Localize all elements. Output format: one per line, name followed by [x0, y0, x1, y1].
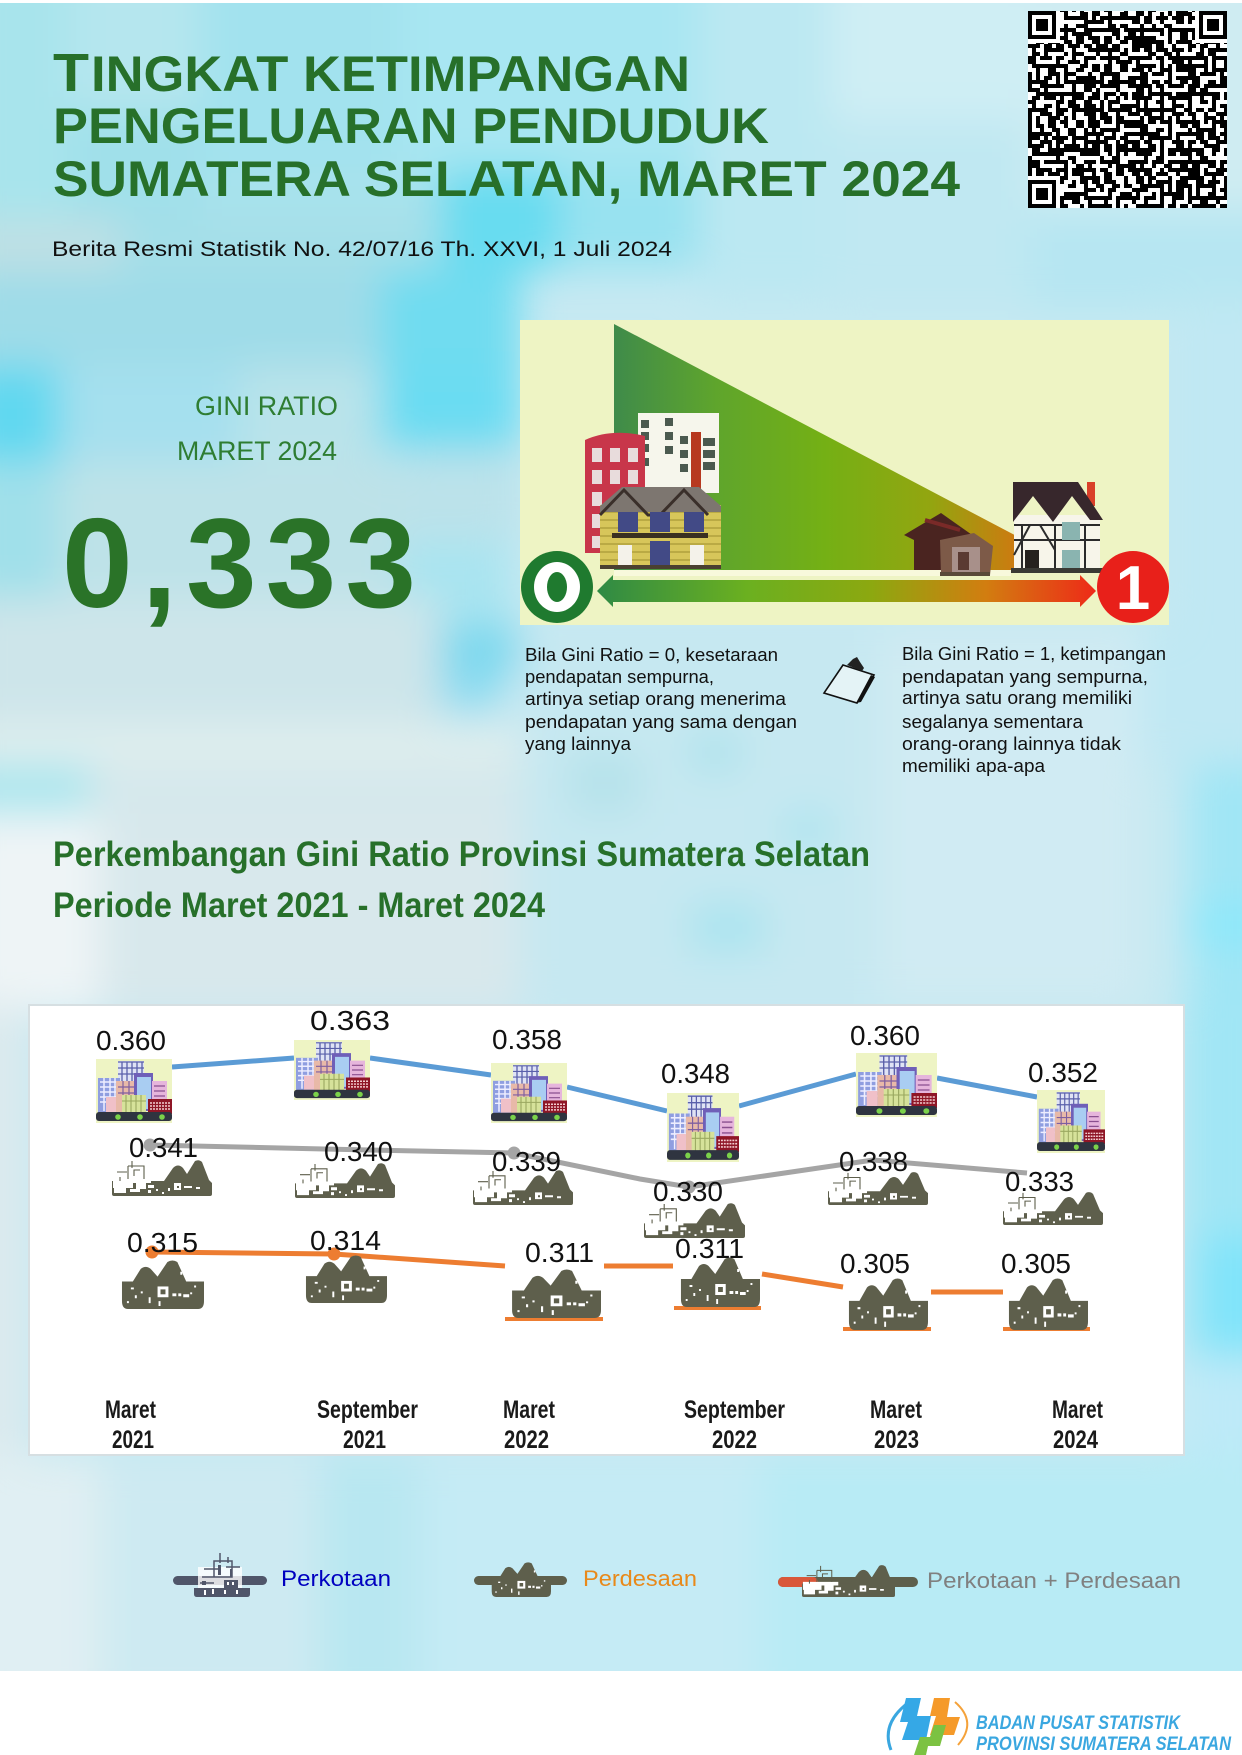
axis labels: 2021: [343, 1426, 386, 1454]
data labels: perdesaan: 0.311: [675, 1233, 744, 1264]
axis labels: September: [317, 1396, 418, 1424]
axis labels: Maret: [105, 1396, 157, 1424]
icon: white timber house: [1011, 482, 1103, 573]
icon: zero badge: [521, 551, 593, 623]
text block: gini ratio zero: pendapatan sempurna,: [525, 666, 714, 687]
gini ratio headline: [62, 391, 416, 634]
text block: gini ratio zero: Bila Gini Ratio = 0, kesetaraan: [525, 644, 778, 665]
text block: gini ratio zero: artinya setiap orang menerima: [525, 688, 787, 709]
data labels: perdesaan: [127, 1225, 1071, 1279]
data labels: gabungan: 0.330: [653, 1176, 723, 1207]
text block: gini ratio zero: yang lainnya: [525, 733, 632, 754]
data labels: gabungan: 0.339: [492, 1146, 561, 1177]
data labels: perkotaan: 0.360: [850, 1020, 920, 1051]
data labels: perdesaan: 0.315: [127, 1227, 198, 1258]
icon: one badge: 1: [1116, 554, 1150, 623]
title: SUMATERA SELATAN, MARET 2024: [53, 151, 960, 207]
data labels: perkotaan: 0.358: [492, 1024, 562, 1055]
data labels: perdesaan: 0.305: [840, 1248, 910, 1279]
data labels: gabungan: [129, 1132, 1074, 1207]
big value: 0,333: [62, 492, 416, 634]
icons: perkotaan markers: [96, 1040, 1105, 1162]
text block: gini ratio one: pendapatan yang sempurna,: [902, 666, 1148, 687]
panel: line chart: [29, 1005, 1184, 1455]
text block: gini ratio one: Bila Gini Ratio = 1, ketimpangan: [902, 643, 1166, 664]
arrow: equality to inequality scale: [597, 575, 1096, 607]
data labels: gabungan: 0.340: [324, 1136, 393, 1167]
legend: [173, 1553, 1181, 1597]
axis labels: 2023: [874, 1426, 919, 1454]
footer white band: [0, 1671, 1242, 1755]
axis labels: 2021: [112, 1426, 154, 1454]
axis labels: Maret: [1052, 1396, 1104, 1424]
data labels: perkotaan: 0.360: [96, 1025, 166, 1056]
legend item: perkotaan + perdesaan: [778, 1565, 1181, 1597]
gradient wedge: [614, 324, 1081, 570]
data labels: perdesaan: 0.305: [1001, 1248, 1071, 1279]
icons: perdesaan markers: [122, 1255, 1088, 1330]
axis labels: September: [684, 1396, 785, 1424]
data labels: gabungan: 0.341: [129, 1132, 198, 1163]
title: INGKAT KETIMPANGAN: [91, 46, 690, 102]
text block: gini ratio one: artinya satu orang memiliki: [902, 687, 1132, 708]
axis labels: Maret: [870, 1396, 923, 1424]
axis labels: 2022: [712, 1426, 757, 1454]
axis labels: 2022: [504, 1426, 549, 1454]
icons: gabungan markers: [112, 1160, 1103, 1238]
logo text: BADAN PUSAT STATISTIK: [976, 1713, 1181, 1734]
legend item: perkotaan + perdesaan: Perkotaan + Perdesaan: [927, 1568, 1181, 1593]
logo: BPS: [888, 1698, 1232, 1755]
data labels: gabungan: 0.338: [839, 1146, 908, 1177]
data labels: perdesaan: 0.311: [525, 1237, 594, 1268]
logo text: [976, 1713, 1232, 1755]
text block: gini ratio zero: pendapatan yang sama dengan: [525, 711, 797, 732]
axis labels: Maret: [503, 1396, 556, 1424]
subtitle: publication reference: Berita Resmi Statistik No. 42/07/16 Th. XXVI, 1 Juli 2024: [52, 238, 672, 261]
data labels: gabungan: 0.333: [1005, 1166, 1074, 1197]
panel: gini ratio illustration: [520, 320, 1169, 625]
gini ratio headline: GINI RATIO: [195, 391, 338, 421]
text block: gini ratio one: segalanya sementara: [902, 711, 1084, 732]
data labels: perkotaan: [96, 1005, 1098, 1089]
text block: gini ratio one: memiliki apa-apa: [902, 755, 1046, 776]
gini ratio headline: MARET 2024: [177, 436, 337, 466]
section heading: Periode Maret 2021 - Maret 2024: [53, 886, 545, 925]
title: PENGELUARAN PENDUDUK: [53, 98, 769, 154]
legend item: perdesaan: [474, 1562, 697, 1597]
axis labels: [105, 1396, 1104, 1454]
legend item: perkotaan: [173, 1553, 391, 1597]
legend item: perkotaan: Perkotaan: [281, 1566, 391, 1591]
icon: city buildings: [585, 413, 721, 569]
data labels: perkotaan: 0.363: [310, 1005, 390, 1036]
text block: gini ratio zero: [525, 644, 797, 754]
data labels: perkotaan: 0.352: [1028, 1057, 1098, 1088]
icon: small brown houses: [904, 513, 993, 576]
series: perdesaan line: [148, 1248, 1090, 1329]
text block: gini ratio one: orang-orang lainnya tidak: [902, 733, 1122, 754]
axis labels: 2024: [1053, 1426, 1098, 1454]
series: perkotaan line: [172, 1058, 1037, 1111]
section heading: Perkembangan Gini Ratio Provinsi Sumatera Selatan: [53, 835, 870, 874]
section heading: [53, 835, 870, 925]
QR code: [1028, 11, 1227, 208]
legend item: perdesaan: Perdesaan: [583, 1566, 697, 1591]
icon: one badge: [1097, 551, 1169, 623]
title: [53, 43, 960, 207]
icon: clipboard: [824, 657, 875, 703]
data labels: perkotaan: 0.348: [661, 1058, 730, 1089]
series: gabungan line: [146, 1141, 1027, 1191]
text block: gini ratio one: [902, 643, 1166, 776]
data labels: perdesaan: 0.314: [310, 1225, 381, 1256]
title: T: [53, 43, 89, 103]
white strip under wedge: [614, 570, 1011, 576]
